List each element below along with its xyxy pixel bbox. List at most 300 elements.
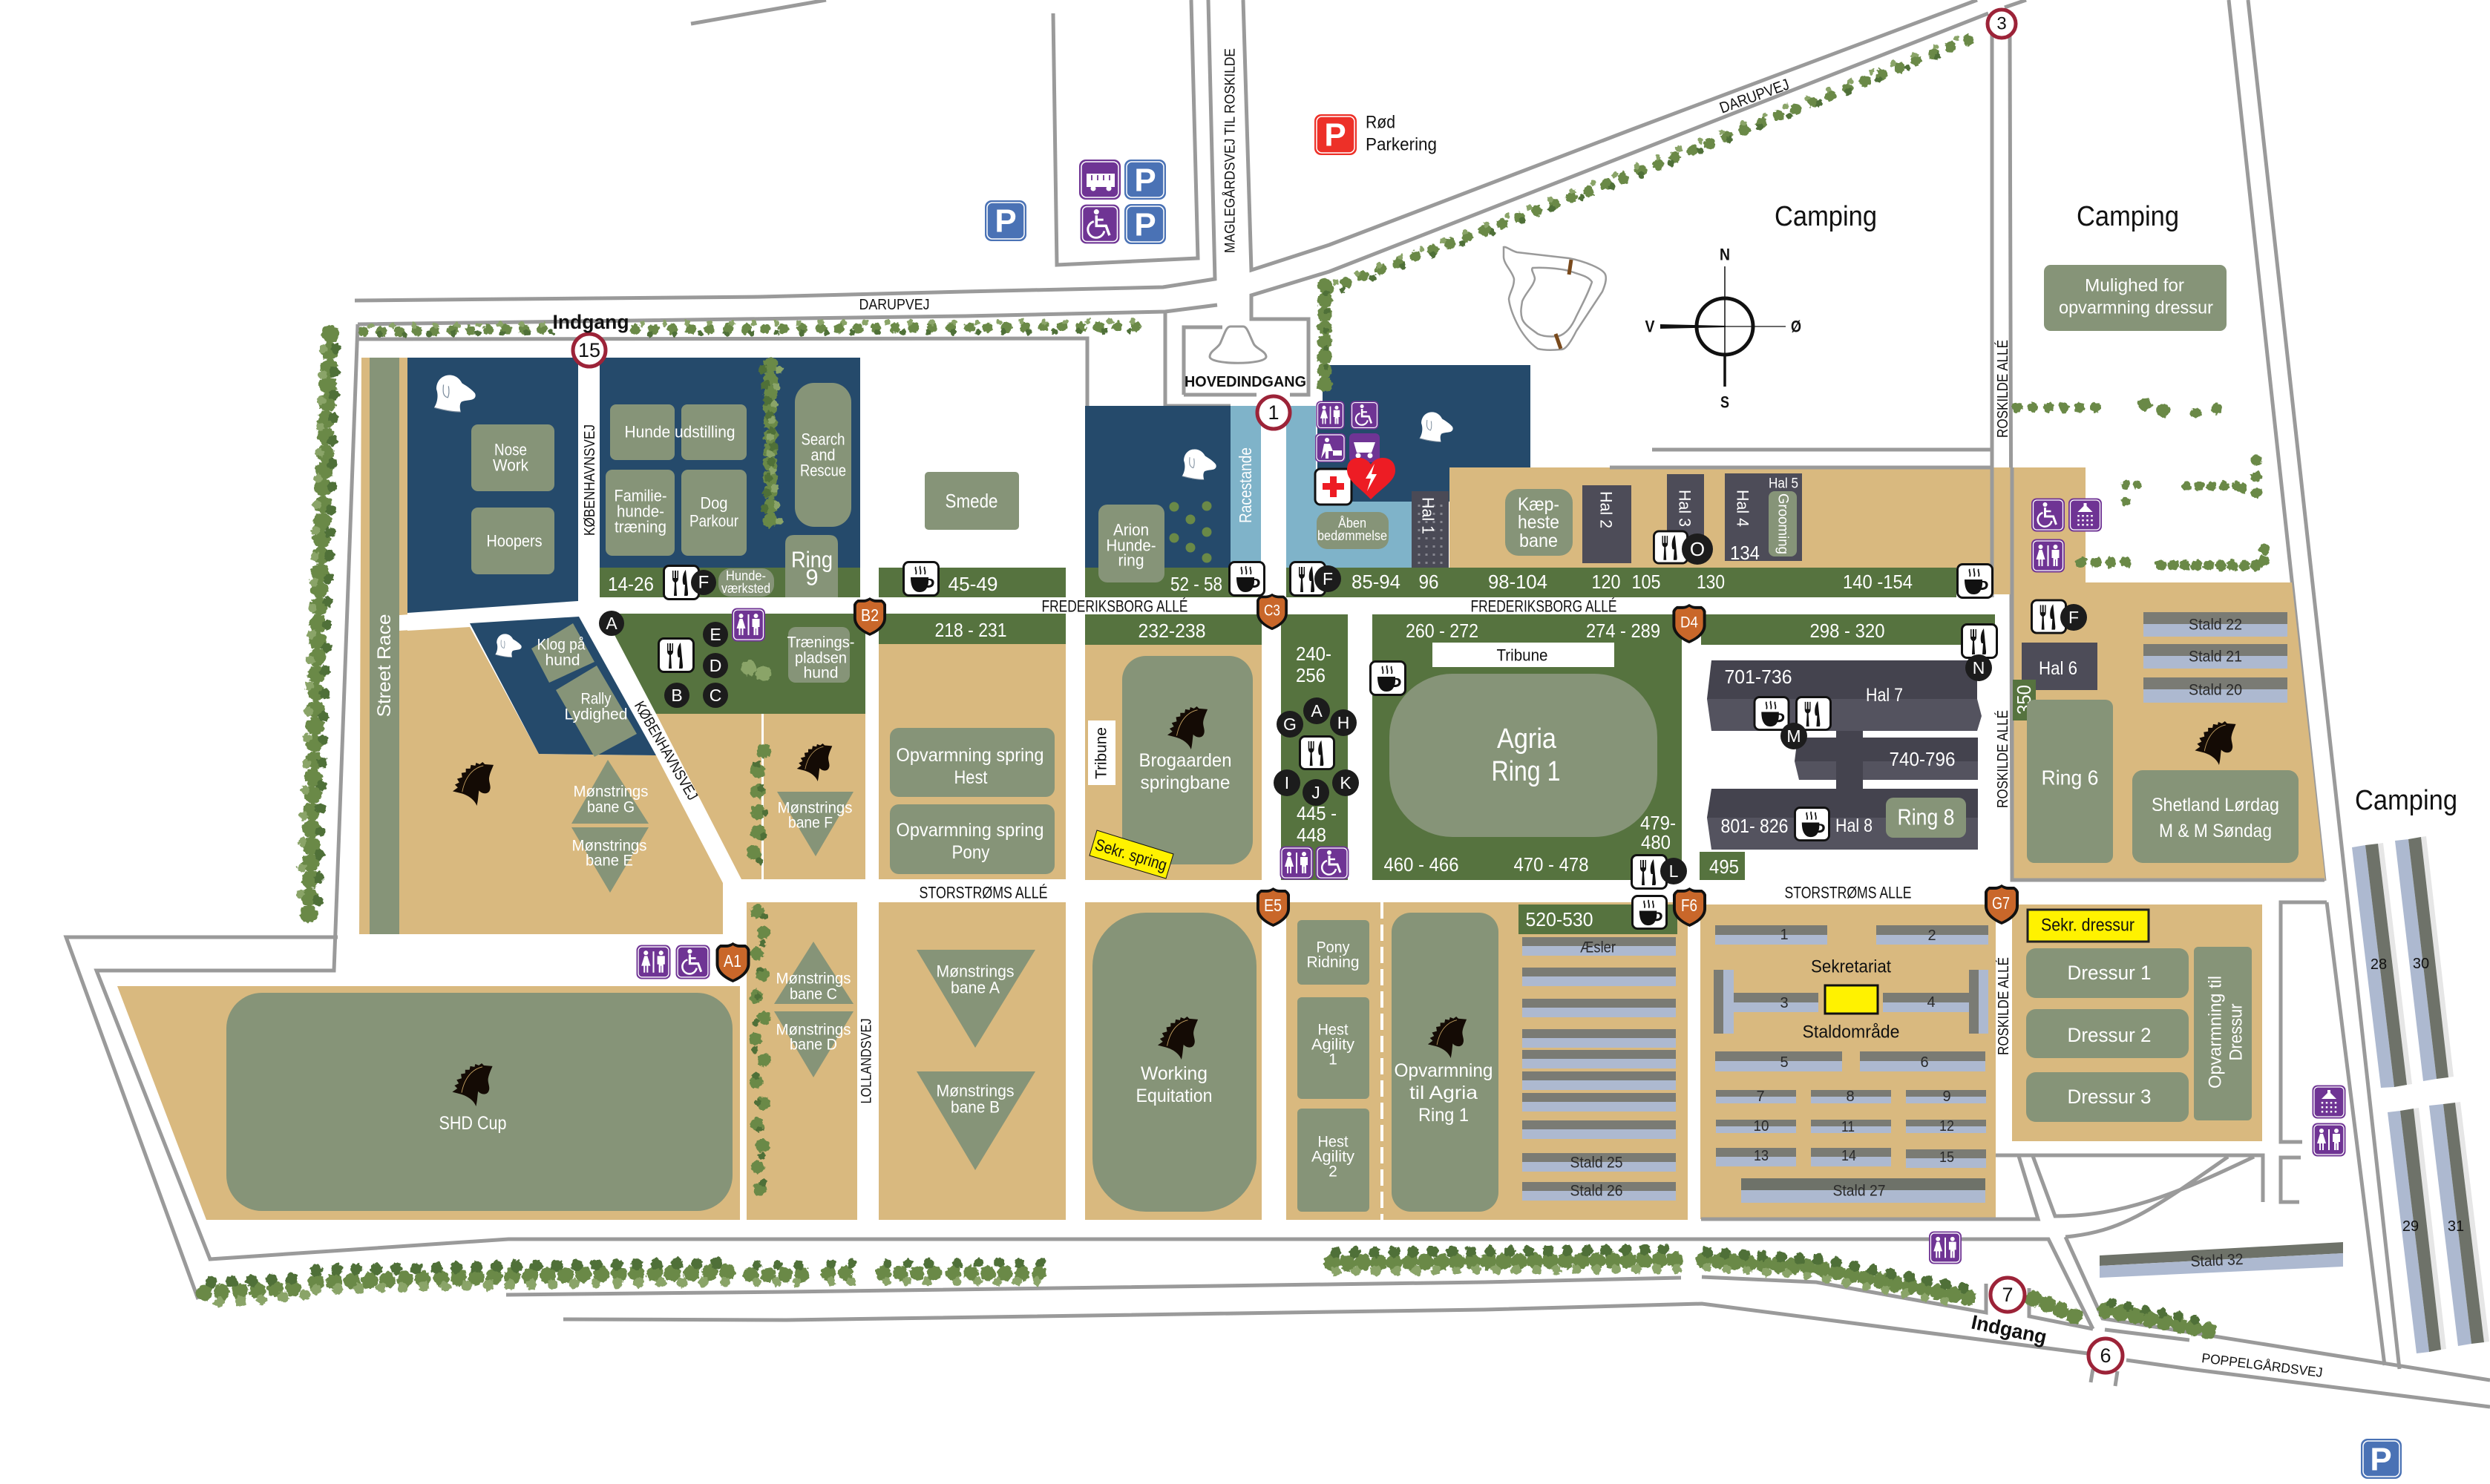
triangle: Mønstrings bane F: bane F [788,815,833,831]
compass: V [1645,318,1655,335]
stable: 7: 7 [1756,1089,1765,1105]
icon: entrance 3: 3 [1996,13,2007,34]
panel: tan field F [656,714,865,879]
stable: Stald 21: Stald 21 [2189,649,2242,665]
stable: Stald 27 [1741,1178,1985,1203]
label: Street Race: Street Race [374,614,395,717]
panel: Agria arena: 480 [1641,831,1671,853]
icon: horse head [453,762,494,806]
panel: green area A-E [613,614,865,714]
building: Hal 8 [1707,789,1978,850]
icon: horse head [1428,1017,1467,1058]
shield: B2 [854,597,886,636]
panel: tan band halls [1449,467,2086,594]
field: Shetland Lørdag M & M Søndag: Shetland Lørdag [2152,795,2279,815]
strip: stands 85-154: 105 [1631,571,1661,593]
strip: stands 232-238: 232-238 [1138,620,1205,642]
panel: dog area north [600,358,860,568]
icon: horse head [797,743,832,781]
panel: Agria arena: 479- [1640,812,1676,834]
trees: dots [1174,506,1207,564]
field: Opvarmning til Agria Ring 1: Opvarmning [1394,1060,1493,1081]
triangle: Mønstrings bane C [774,942,854,1004]
field: Opvarmning spring Pony: Pony [951,842,990,863]
building: Hal 4: 134 [1730,542,1760,564]
label: DARUPVEJ west: DARUPVEJ [859,297,929,313]
stable: 6 [1860,1051,1985,1071]
label: Sekr. dressur: Sekr. dressur [2041,916,2134,935]
compass: S [1720,393,1729,411]
stable: 12 [1906,1118,1986,1135]
field: Mulighed for opvarmning dressur [2044,265,2227,331]
field: Nose Work: Work [493,456,529,475]
stable row [1522,1093,1676,1112]
field: Hundeværksted: værksted [721,581,770,596]
field: Search and Rescue: and [810,445,836,464]
road line over tan [1610,467,2324,880]
strip: stands 85-154: 98-104 [1488,571,1547,593]
building: Hal 3 [1667,474,1704,561]
strip: stands 52-58: 52 - 58 [1170,573,1222,595]
trees: south row 3 [1332,1250,1679,1271]
stable row [1522,1120,1676,1139]
icon: letter J [1303,779,1329,806]
icon: restaurant O: O [1690,538,1705,560]
field: Ring 8: Ring 8 [1897,804,1955,830]
stand: 350: 350 [2013,685,2035,715]
icon: parking red: P [1324,117,1346,153]
shield: A1 [715,942,750,982]
icon: AED heart [1347,458,1395,499]
icon: dog head [1182,449,1216,479]
icon: baby change [1315,433,1346,462]
icon: entrance 7 [1991,1278,2025,1312]
panel: Agria arena: 470 - 478 [1514,853,1588,876]
stable: 2 [1876,925,1988,945]
strip: stands 14-26: 14-26 [608,573,654,595]
triangle: Mønstrings bane E: bane E [586,852,633,870]
stable: 29 [2388,1108,2446,1353]
field: Dressur 2 [2026,1009,2189,1058]
shield: E5 [1257,887,1290,927]
panel: light blue area [1286,406,1412,568]
stable: Stald 20 [2143,677,2287,703]
field: Kæpheste bane: bane [1519,531,1558,551]
field: Search and Rescue [795,383,851,527]
icon: coffee [904,562,938,595]
icon: restaurant N [1962,625,1996,681]
stable: 9 [1906,1089,1986,1105]
field: Familiehundetræning: hunde- [617,502,664,521]
panel: tan field A-B [879,902,1066,1220]
field: Åben bedømmelse [1317,512,1389,549]
stable: 3 [1714,970,1818,1034]
icon: dog head [1420,412,1453,441]
strip: stands 45-49: 45-49 [949,573,997,595]
triangle: Mønstrings bane G: bane G [587,798,635,816]
icon: coffee [1795,807,1829,841]
strip: stands 45-49 [879,568,1066,597]
stable: Stald 32 [2100,1242,2343,1278]
strip: stands 298-320 [1701,614,1995,645]
icon: letter I [1274,769,1300,796]
stable row [1522,1071,1676,1090]
field: Opvarmning til Dressur: Dressur [2227,1003,2246,1061]
label: Tribune: Tribune [1496,646,1548,665]
field: Kæpheste bane: Kæp- [1518,494,1559,515]
strip: stands 298-320: 298 - 320 [1809,620,1885,642]
field: Ring 9 [785,535,838,597]
field: Mulighed for opvarmning dressur: Mulighed for [2085,276,2184,295]
field: Hest Agility 2: 2 [1328,1163,1337,1180]
icon: letter D: D [710,656,721,675]
icon: letter H [1330,709,1357,736]
triangle: Mønstrings bane G [571,760,649,824]
icon: horse head [2195,721,2236,765]
label: DARUPVEJ east: DARUPVEJ [1717,76,1792,117]
field: Dog Parkour: Parkour [689,512,738,530]
field: Klog på hund: hund [545,651,580,669]
field: Agria Ring 1: Ring 1 [1492,756,1560,787]
label: Tribune vertical: Tribune [1092,727,1110,779]
icon: entrance 3 [1988,10,2016,38]
field: Working Equitation: Working [1141,1063,1208,1084]
panel: dog area main entrance [1317,365,1530,502]
strip: stands 232-238 [1085,614,1262,645]
icon: restaurant F [664,565,716,600]
building: Hal 2 [1582,485,1631,563]
label: Sekr. spring: Sekr. spring [1093,835,1169,875]
field: Opvarmning til Dressur [2194,947,2252,1120]
stable: 13: 13 [1754,1148,1769,1164]
building: Hal 7/8 connector [1836,731,1863,789]
strip: stands 520-530 [1518,904,1677,934]
icon: restaurant L: L [1669,861,1679,881]
icon: dog head [434,375,476,412]
building: Hal 1 [1412,491,1449,568]
stable: 3: 3 [1780,995,1789,1011]
field: Klog på hund [531,623,594,683]
divider dashed [1380,902,1383,1220]
field: Arion Hundering [1098,505,1164,582]
icon: coffee [1958,564,1992,598]
field: Opvarmning til Agria Ring 1 [1392,913,1498,1212]
shield: C3: C3 [1264,603,1280,619]
trees: column in dog area [763,365,779,527]
panel: food column: 445 - [1297,802,1337,824]
icon: restaurant F: F [698,573,709,592]
trees: north-east hedges [2081,460,2265,565]
stable: 6: 6 [1920,1054,1929,1071]
icon: wheelchair [676,945,710,979]
field: Pony Ridning: Pony [1317,939,1350,956]
icon: horse head [1158,1017,1198,1060]
compass [1645,245,1801,411]
icon: restaurant F: F [1323,569,1333,588]
icon: parking blue south-east [2361,1439,2402,1479]
stable row [1522,968,1676,986]
field: Nose Work [471,424,554,491]
icon: restaurant F [2031,600,2087,633]
trees: south row 5 [2034,1298,2215,1332]
stable: 4: 4 [1927,994,1936,1011]
icon: restaurant F: F [2068,608,2079,627]
icon: parking blue south-east: P [2370,1441,2392,1478]
triangle: Mønstrings bane B [917,1071,1035,1170]
building: Hal 5 Grooming [1763,473,1802,561]
icon: letter E [703,622,728,647]
stable: 5 [1715,1051,1842,1071]
icon: letter C: C [710,686,721,705]
stable: 12: 12 [1939,1118,1954,1135]
field: Familiehundetræning: Familie- [615,487,666,505]
triangle: Mønstrings bane C: Mønstrings [776,971,851,987]
road line under Staldområde [1701,1217,2038,1221]
icon: entrance 6: 6 [2100,1345,2111,1367]
shield: F6 [1673,887,1706,927]
shield: E5: E5 [1264,896,1282,915]
compass: N [1720,245,1730,264]
trees: south row 4 [1704,1252,1980,1304]
panel: dog area Klog/Rally [470,617,656,755]
panel: tan field Brogaarden [1085,645,1262,880]
trees: south row 1 [204,1263,731,1302]
triangle: Mønstrings bane A: Mønstrings [937,962,1014,981]
field: Opvarmning til Dressur: Opvarmning til [2206,976,2225,1089]
stand: 495 [1700,852,1745,880]
icon: toilets [637,945,670,979]
label: ROSKILDE ALLÉ south: ROSKILDE ALLÉ [1995,957,2012,1055]
icon: letter B [664,683,689,708]
panel: Agria arena [1372,614,1682,880]
field: Hest Agility 1: 1 [1328,1051,1337,1068]
panel: tan column Lolland [747,902,857,1220]
field: Opvarmning spring Pony: Opvarmning spring [897,820,1043,841]
triangle: Mønstrings bane F: Mønstrings [778,800,852,816]
strip: stands 520-530: 520-530 [1526,908,1593,930]
trees: column field F [753,751,766,872]
field: SHD Cup: SHD Cup [439,1113,506,1134]
trees: top strip west [364,324,553,335]
building: Hal 7: Hal 7 [1866,685,1903,706]
stable: 28: 28 [2371,956,2387,973]
stable row [1522,1029,1676,1048]
icon: parking blue [985,200,1026,241]
icon: letter J: J [1311,783,1320,802]
stable: 8 [1811,1089,1891,1105]
building: Hal 4: Hal 4 [1734,490,1752,527]
triangle: Mønstrings bane E: Mønstrings [571,837,647,855]
shield: A1: A1 [724,951,741,971]
icon: toilets [2031,539,2065,573]
label: Camping north-east: Camping [2077,201,2179,232]
triangle: Mønstrings bane A [917,950,1035,1048]
icon: parking blue: P [1134,162,1156,199]
stable: 31 [2429,1102,2489,1346]
stable: 1: 1 [1780,927,1789,943]
label: LOLLANDSVEJ: LOLLANDSVEJ [859,1018,874,1104]
field: Åben bedømmelse: Åben [1338,516,1366,531]
icon: coffee [1370,662,1406,695]
panel: Racestande [1231,406,1261,568]
icon: horse head [452,1063,493,1106]
triangle: Mønstrings bane D: Mønstrings [776,1021,851,1039]
field: Hundeværksted [718,568,774,597]
trees: camping groups [2017,404,2235,414]
stable: Stald 25 [1522,1153,1676,1172]
icon: handcart [1349,433,1380,462]
stable: 30: 30 [2413,956,2429,972]
field: Hest Agility 1: Agility [1311,1036,1355,1054]
strip: stands 85-154: 130 [1697,571,1725,593]
icon: toilets [1316,401,1345,430]
strip: stands 218-231 [879,614,1066,644]
field: Shetland Lørdag M & M Søndag: M & M Søndag [2159,821,2272,841]
panel: dog area Arion [1085,406,1231,568]
icon: toilets [2313,1123,2345,1156]
field: Træningspladsen hund [787,627,855,683]
stable: 29: 29 [2402,1218,2419,1235]
icon: shower [2313,1085,2345,1119]
trees: entrance column [1325,286,1326,390]
icon: letter A [1303,697,1330,724]
panel: Staldområde tan [1700,904,1996,1219]
icon: toilets [1929,1231,1962,1264]
panel: tan field Working Equitation [1085,902,1262,1220]
stable: 1 [1715,925,1827,945]
label: Staldområde: Staldområde [1802,1022,1900,1042]
icon: letter H: H [1337,713,1349,732]
field: Hoopers [471,508,554,574]
panel: left tan field [359,358,723,934]
label: Tribune [1432,643,1614,667]
field: Smede [925,472,1019,530]
icon: letter A: A [1311,701,1323,720]
building: 740-796 [1795,738,1978,780]
stable: Stald 26: Stald 26 [1570,1183,1622,1199]
road crossing [399,603,579,631]
strip: stands 85-154: 85-94 [1352,571,1400,593]
strip: stands 85-154: 96 [1419,571,1438,593]
field: Ring 6 [2027,700,2113,863]
stable: 11 [1811,1119,1891,1135]
building: Hal 1: Hal 1 [1419,497,1437,534]
panel: Agria arena: 274 - 289 [1586,620,1660,642]
icon: restaurant [1300,736,1334,769]
field: Hest Agility 2: Hest [1318,1134,1349,1150]
field: Dressur 1: Dressur 1 [2068,962,2151,984]
stable: Stald 20: Stald 20 [2189,681,2242,699]
trees: top strip east [635,321,1144,334]
lake [1504,247,1606,350]
building: Hal 2: Hal 2 [1597,491,1615,528]
stable: Stald 22 [2143,612,2287,637]
panel: dog area north-west [407,358,578,613]
stable: 4 [1883,970,1988,1034]
stable rows west [1522,937,1676,1201]
field: Dressur 1 [2026,948,2189,998]
field: Arion Hundering: ring [1118,551,1144,570]
field: Familiehundetræning: træning [615,518,666,536]
field: Brogaarden springbane [1122,656,1253,864]
icon: toilets [1280,846,1314,880]
field: Search and Rescue: Search [802,430,845,448]
stable: 11: 11 [1841,1119,1855,1135]
stable: 30 [2395,836,2454,1081]
field: Ring 8 [1886,798,1966,838]
stable: 14 [1811,1148,1891,1166]
triangle: Mønstrings bane A: bane A [951,978,1000,997]
field: Search and Rescue: Rescue [800,462,846,479]
field: Rally Lydighed: Lydighed [564,706,628,723]
strip: stands 85-154: 120 [1591,571,1621,593]
label: Rød Parkering [1366,113,1437,154]
stable: 7 [1716,1089,1796,1105]
trees: small group [749,668,765,686]
label: MAGLEGÅRDSVEJ TIL ROSKILDE: MAGLEGÅRDSVEJ TIL ROSKILDE [1223,48,1238,253]
field: Working Equitation: Equitation [1136,1086,1213,1106]
field: Hest Agility 2 [1297,1109,1369,1212]
icon: restaurant F [1290,562,1341,595]
icon: letter G [1277,711,1303,738]
stand: 495: 495 [1709,856,1739,878]
icon: wheelchair [1315,846,1349,880]
panel: SHD Cup tan field [117,986,740,1220]
stable: 2: 2 [1927,928,1936,944]
field: Arion Hundering: Arion [1113,521,1149,539]
strip: stands 14-26 [600,568,860,597]
icon: restaurant M [1780,697,1831,749]
icon: wheelchair [1350,401,1379,430]
icon: coffee [1229,562,1265,595]
icon: letter I: I [1285,773,1289,792]
strip: stands 218-231: 218 - 231 [935,619,1006,641]
icon: letter E: E [710,625,721,644]
panel: Racestande: Racestande [1236,447,1255,523]
building: Hal 7 [1707,660,1982,731]
field: Hest Agility 1: Hest [1318,1021,1349,1039]
shield: G7: G7 [1992,893,2010,913]
stable: 5: 5 [1780,1054,1789,1071]
label: Camping east: Camping [2355,785,2457,816]
field: Familiehundetræning [606,470,675,556]
icon: restaurant M: M [1786,726,1801,746]
stable: 31: 31 [2448,1218,2464,1235]
icon: letter K: K [1340,773,1352,792]
stable: 15: 15 [1939,1149,1954,1166]
field: Brogaarden springbane: Brogaarden [1138,750,1232,771]
field: Rally Lydighed [556,666,637,757]
icon: toilets [732,608,765,641]
field: Hest Agility 2: Agility [1311,1149,1355,1165]
stable: 8: 8 [1846,1089,1855,1105]
stable: Stald 27: Stald 27 [1833,1183,1885,1199]
label: STORSTRØMS ALLE east: STORSTRØMS ALLE [1784,883,1912,902]
icon: first aid [1315,469,1352,505]
icon: horse head [1167,706,1208,749]
panel: tan field Pony/Agility [1286,902,1688,1220]
label: ROSKILDE ALLÉ mid: ROSKILDE ALLÉ [1994,710,2011,808]
field: Kæpheste bane [1505,489,1573,556]
icon: wheelchair [2031,499,2065,531]
icon: letter G: G [1283,715,1297,734]
triangle: Mønstrings bane B: Mønstrings [937,1082,1014,1100]
label: POPPELGÅRDSVEJ: POPPELGÅRDSVEJ [2201,1350,2324,1380]
shield: F6: F6 [1681,896,1697,915]
field: Shetland Lørdag M & M Søndag [2132,770,2299,863]
field: Hundeværksted: Hunde- [726,568,766,583]
field: Dressur 2: Dressur 2 [2068,1024,2151,1046]
